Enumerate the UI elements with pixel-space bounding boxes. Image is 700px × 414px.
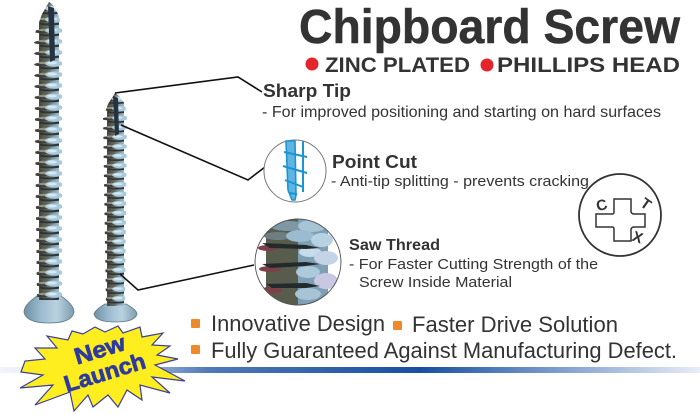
leader lines [115,77,265,290]
sharp tip text [262,80,661,121]
orange bullet [191,319,200,328]
subtitle features: PHILLIPS HEAD [497,53,680,77]
large screw head [24,296,74,323]
small screw shaft [103,93,127,306]
icon: saw thread magnified circle [254,218,342,306]
subtitle features [306,53,680,77]
red bullet [480,58,494,72]
saw thread text: Saw Thread [349,237,440,254]
saw thread text: Screw Inside Material [359,274,512,291]
large screw shaft [34,2,62,300]
small screw head [94,304,137,322]
gradient band [0,367,700,373]
icon: phillips head [579,174,661,256]
thread crests [271,221,300,231]
red bullet [306,58,318,70]
icon: point cut circle [264,140,326,202]
title: Chipboard Screw [299,1,681,54]
icon: phillips head: X [630,228,645,247]
saw thread text [349,237,598,291]
sharp tip text: - For improved positioning and starting on hard surfaces [262,104,661,121]
icon: phillips head: C [594,196,609,215]
small screw [94,93,137,322]
sharp tip text: Sharp Tip [263,80,351,101]
large screw tip slot [48,6,55,62]
benefit list: Fully Guaranteed Against Manufacturing Defect. [211,338,677,363]
orange bullet [393,321,402,330]
small screw tip slot [113,96,119,136]
orange bullet [191,345,200,354]
new launch starburst badge: New [71,329,128,369]
large screw [24,2,74,323]
icon: phillips head: T [637,195,654,214]
new launch starburst badge: Launch [61,348,149,397]
benefit list [191,311,677,363]
subtitle features: ZINC PLATED [325,53,470,77]
benefit list: Faster Drive Solution [412,312,618,337]
new launch starburst badge [20,326,185,411]
point cut text [331,152,589,190]
point cut text: Point Cut [332,152,417,172]
saw thread text: - For Faster Cutting Strength of the [349,256,598,273]
benefit list: Innovative Design [211,311,385,336]
point cut text: - Anti-tip splitting - prevents cracking [331,173,589,190]
